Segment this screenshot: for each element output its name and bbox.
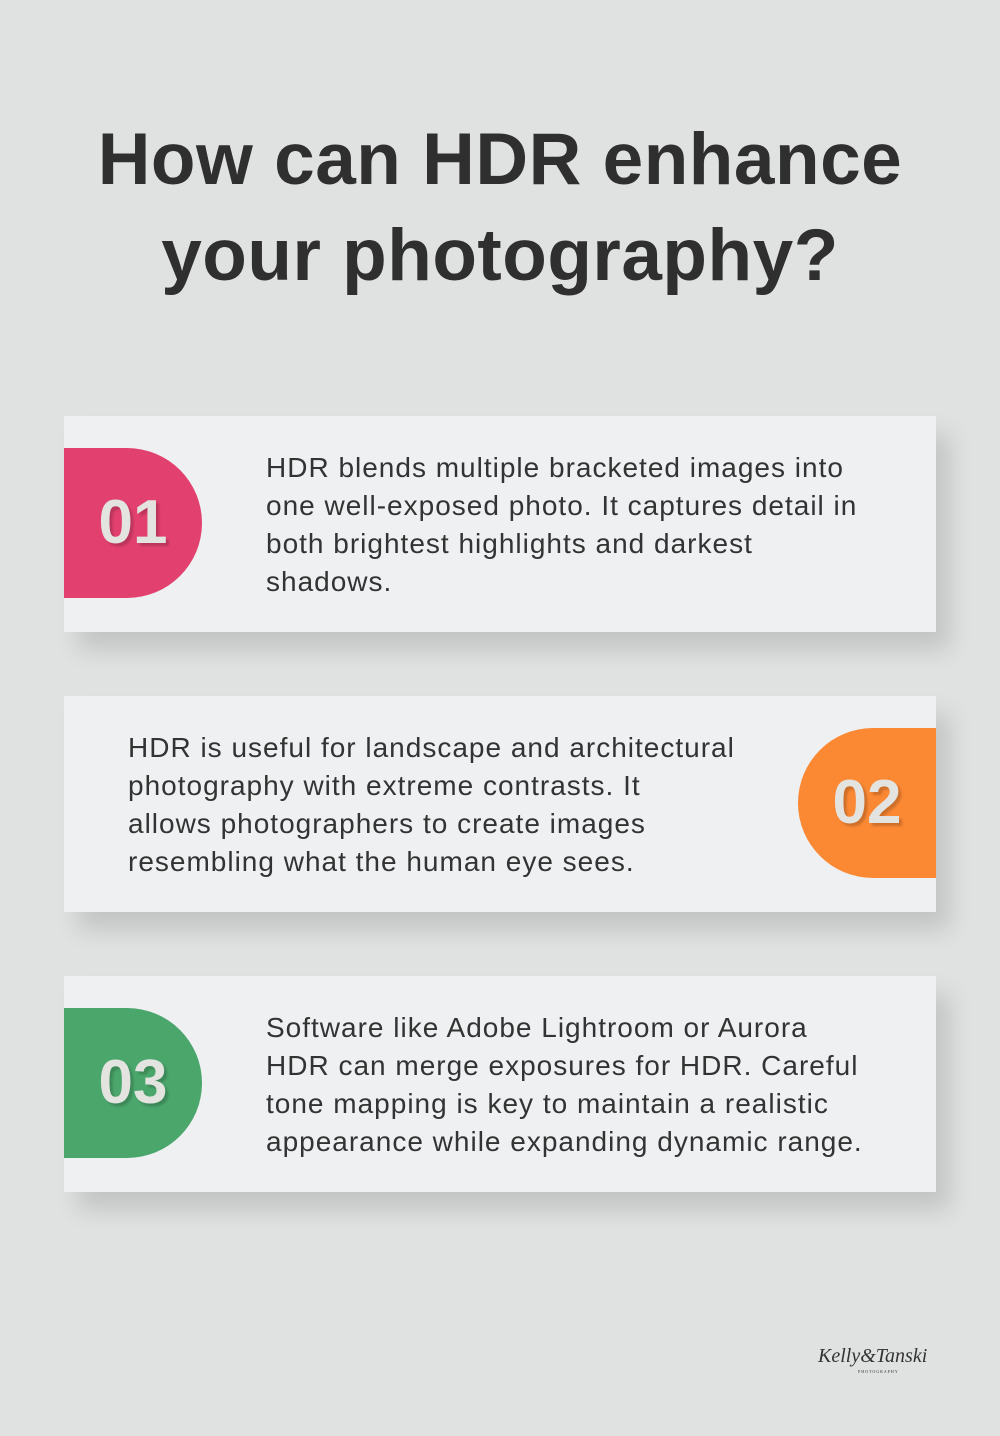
badge 02 [798, 728, 936, 878]
badge 02: 02 [833, 768, 901, 837]
text 02 [128, 732, 735, 877]
title: How can HDR enhance [98, 119, 902, 200]
text 03: HDR can merge exposures for HDR. Careful [266, 1050, 858, 1081]
text 01: both brightest highlights and darkest [266, 528, 753, 559]
panel: card 02 [64, 696, 936, 912]
text 01: one well-exposed photo. It captures detail in [266, 490, 857, 521]
text 02: allows photographers to create images [128, 808, 646, 839]
signature logo: Kelly&Tanski [818, 1345, 927, 1367]
text 01 [266, 452, 857, 597]
badge 01 [64, 448, 202, 598]
text 02: photography with extreme contrasts. It [128, 770, 641, 801]
panel: card 03 [64, 976, 936, 1192]
badge 01: 01 [99, 488, 167, 557]
text 02: resembling what the human eye sees. [128, 846, 635, 877]
title: your photography? [161, 215, 839, 296]
text 03: Software like Adobe Lightroom or Aurora [266, 1012, 808, 1043]
panel: card 01 [64, 416, 936, 632]
text 01: shadows. [266, 566, 392, 597]
badge 03 [64, 1008, 202, 1158]
badge 03: 03 [99, 1048, 167, 1117]
text 03: tone mapping is key to maintain a realistic [266, 1088, 829, 1119]
text 03: appearance while expanding dynamic range. [266, 1126, 863, 1157]
text 02: HDR is useful for landscape and architectural [128, 732, 735, 763]
signature logo: PHOTOGRAPHY [858, 1369, 899, 1374]
title [98, 119, 902, 296]
text 01: HDR blends multiple bracketed images into [266, 452, 844, 483]
text 03 [266, 1012, 863, 1157]
